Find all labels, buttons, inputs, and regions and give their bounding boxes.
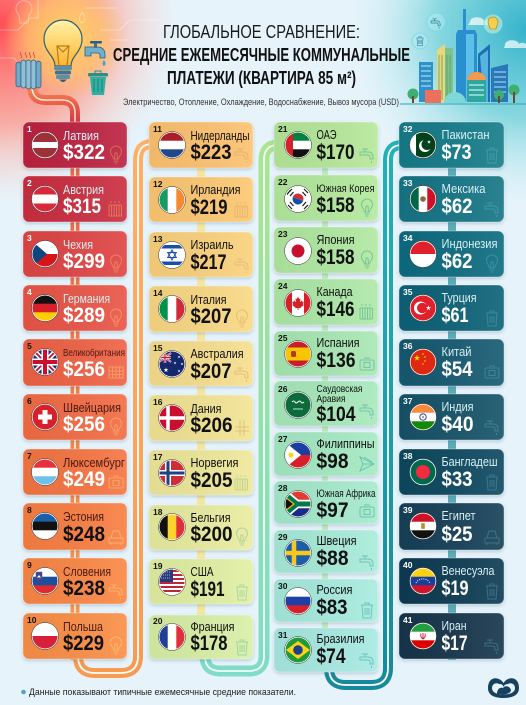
name: Пакистан	[442, 127, 490, 142]
pipes connecting the columns	[32, 86, 452, 685]
card: Великобритания: 5	[27, 341, 32, 351]
cost: $217	[190, 250, 227, 274]
logo	[488, 678, 519, 698]
flag: Индонезия	[410, 240, 436, 268]
pipe: column 3 to column 4	[329, 145, 402, 685]
name: Филиппины	[316, 436, 374, 451]
card: Франция	[149, 615, 253, 659]
icon: tap	[485, 421, 498, 435]
card: Латвия	[23, 122, 127, 168]
cost: $25	[442, 522, 473, 546]
card: Филиппины	[274, 432, 378, 476]
card: Германия: 4	[27, 287, 32, 297]
icon: bulb	[110, 255, 122, 272]
card: Бангладеш	[399, 449, 504, 495]
card: Словения: 9	[27, 560, 32, 570]
cost: $98	[316, 449, 349, 473]
card: Венесуэла: 40	[403, 560, 413, 570]
card: Турция: 35	[403, 287, 413, 297]
name: Бельгия	[190, 510, 230, 525]
cost: $315	[63, 194, 101, 218]
card: Венесуэла	[399, 558, 504, 604]
icon: radiator	[235, 475, 248, 490]
cost: $136	[316, 348, 356, 372]
name: Аравия	[316, 393, 346, 405]
name: Польша	[63, 619, 104, 634]
card: Бразилия: 31	[278, 630, 288, 640]
name: Нидерланды	[190, 128, 250, 143]
name: Великобритания	[63, 347, 125, 359]
name: Венесуэла	[442, 563, 495, 578]
cost: $73	[442, 140, 472, 164]
flag: Ирландия	[158, 186, 186, 214]
icon: tap	[109, 585, 122, 599]
flag: Россия	[284, 588, 312, 614]
card: Израиль: 13	[153, 234, 163, 244]
flag: Австрия	[32, 186, 58, 212]
title	[113, 22, 410, 88]
name: Швейцария	[63, 400, 121, 415]
card: Испания: 25	[278, 333, 288, 343]
flag: Южная Корея	[284, 186, 312, 212]
flag: Иран	[410, 622, 436, 650]
flag: Франция	[158, 624, 186, 650]
cost: $74	[316, 644, 346, 668]
name: Франция	[190, 619, 234, 634]
cost: $200	[190, 522, 233, 546]
pipe: column 3 spine	[322, 122, 328, 672]
card: Люксембург	[23, 449, 127, 495]
card: Швейцария	[23, 394, 127, 440]
card: Иран	[399, 613, 504, 659]
cost: $219	[190, 195, 228, 219]
card: Южная Корея	[274, 175, 378, 221]
name: Чехия	[63, 237, 93, 252]
name: Саудовская	[316, 383, 362, 395]
flag: Канада	[284, 290, 312, 316]
cost: $205	[190, 468, 233, 492]
icon: bulb	[362, 199, 372, 216]
card: Бельгия: 18	[153, 507, 163, 517]
card: Мексика: 33	[403, 178, 413, 188]
name: Израиль	[190, 237, 234, 252]
cost: $256	[63, 412, 105, 436]
icon: bulb	[236, 528, 248, 545]
cost: $19	[442, 576, 469, 600]
icon: bulb	[362, 251, 372, 268]
card: Иран: 41	[403, 615, 413, 625]
card: Южная Африка	[274, 481, 378, 524]
flag: ОАЭ	[284, 132, 312, 158]
card: Канада: 24	[278, 281, 288, 291]
flag: Австралия	[158, 350, 186, 378]
flag: Швеция	[284, 540, 312, 566]
flag: Италия	[158, 296, 186, 322]
flag: Люксембург	[32, 458, 58, 486]
card: Индия	[399, 394, 504, 440]
cost: $248	[63, 522, 105, 546]
name: Италия	[190, 292, 226, 307]
name	[316, 383, 362, 405]
cost: $229	[63, 631, 104, 655]
icon: radiator	[109, 201, 122, 216]
name: Россия	[316, 582, 352, 597]
icon: bulb	[110, 418, 122, 435]
icon: bed	[109, 531, 123, 545]
name: Бангладеш	[442, 454, 498, 469]
icon: tap	[235, 259, 248, 273]
flag: Польша	[32, 622, 58, 650]
icon: grid	[109, 367, 123, 378]
flag: Индия	[410, 404, 436, 430]
icon: radiator	[360, 304, 372, 319]
icon: bulb	[110, 309, 122, 326]
cost: $178	[190, 631, 228, 655]
card: Индонезия: 34	[403, 233, 413, 243]
name: Бразилия	[316, 631, 364, 646]
cost: $158	[316, 193, 355, 217]
card: Китай	[399, 339, 504, 386]
name: Индонезия	[442, 236, 498, 251]
card: Южная Африка: 28	[278, 483, 288, 493]
cost: $40	[442, 412, 474, 436]
name: ОАЭ	[316, 127, 336, 142]
cost: $170	[316, 140, 355, 164]
name: Норвегия	[190, 455, 238, 470]
card: Ирландия: 12	[153, 179, 163, 189]
column 1	[23, 122, 127, 659]
name: Ирландия	[190, 182, 240, 197]
flag: США	[158, 568, 186, 596]
icon: trash	[486, 311, 498, 326]
icon: light bulb	[44, 20, 82, 82]
icon: tap	[360, 556, 373, 570]
icon: bed	[485, 531, 499, 545]
subtitle: Электричество, Отопление, Охлаждение, Водоснабжение, Вывоз мусора (USD)	[123, 97, 399, 107]
card: Нидерланды: 11	[153, 124, 162, 134]
cost: $299	[63, 249, 105, 273]
cost: $289	[63, 303, 105, 327]
name: Южная Корея	[316, 183, 375, 195]
cost: $83	[316, 595, 348, 619]
column 2	[149, 122, 253, 659]
icon: trash	[236, 585, 248, 600]
card: Пакистан	[399, 122, 504, 168]
name: Дания	[190, 401, 222, 416]
column 3	[274, 122, 378, 672]
icon: bulb	[110, 637, 122, 654]
icon: tap	[235, 149, 248, 163]
cost: $17	[442, 631, 468, 655]
cost: $207	[190, 359, 232, 383]
name: Австрия	[63, 182, 104, 197]
cost: $146	[316, 297, 355, 321]
card: ОАЭ: 21	[278, 124, 288, 134]
name: Австралия	[190, 346, 244, 361]
name: Эстония	[63, 509, 104, 524]
column 4	[399, 122, 504, 659]
icon: box	[485, 366, 499, 378]
cost: $207	[190, 304, 232, 328]
card: Италия	[149, 286, 253, 332]
card: Египет: 39	[403, 505, 413, 515]
card: Австрия: 2	[27, 178, 32, 188]
card: Австралия	[149, 341, 253, 386]
flag: Дания	[158, 404, 186, 432]
pipe: column 1 spine	[70, 122, 80, 660]
card: Италия: 14	[153, 288, 163, 298]
cost: $249	[63, 467, 105, 491]
icon: tap	[360, 149, 373, 163]
cost: $97	[316, 498, 349, 522]
card: Япония	[274, 227, 378, 273]
name: Индия	[442, 399, 474, 414]
icon: radiator	[235, 202, 248, 217]
name: Япония	[316, 232, 354, 247]
card: ОАЭ	[274, 122, 378, 168]
card: Эстония	[23, 503, 127, 550]
cost: $62	[442, 249, 473, 273]
icon: tap	[360, 405, 373, 419]
name: Египет	[442, 508, 476, 523]
card: Чехия	[23, 231, 127, 277]
pipe: column 2 spine	[197, 122, 205, 660]
name: Словения	[63, 564, 111, 579]
illustration: city skyline	[400, 9, 526, 104]
card: Бельгия	[149, 505, 253, 550]
name: Германия	[63, 291, 110, 306]
cost: $54	[442, 357, 473, 381]
cost: $191	[190, 577, 225, 601]
flag: Пакистан	[410, 132, 436, 158]
icon: trash bin	[88, 71, 108, 95]
flag: Китай	[410, 348, 436, 376]
icon: trash	[486, 475, 498, 490]
card: Южная Корея: 22	[278, 177, 288, 187]
flag: Испания	[284, 340, 312, 368]
flag: Германия	[32, 294, 58, 322]
name: Латвия	[63, 128, 99, 143]
card: Китай: 36	[403, 341, 413, 351]
card: Израиль	[149, 232, 253, 277]
card: Саудовская Аравия: 26	[278, 384, 288, 394]
icon: tap	[360, 654, 373, 668]
flag: Мексика	[410, 186, 436, 212]
card: Пакистан: 32	[403, 124, 413, 134]
flag: Латвия	[32, 132, 58, 158]
icon: decorative circuit lines, left	[0, 0, 160, 65]
title: ПЛАТЕЖИ (КВАРТИРА 85 м²)	[167, 68, 356, 88]
card: Испания	[274, 331, 378, 376]
card: Австрия	[23, 176, 127, 222]
card: Канада	[274, 279, 378, 325]
flag: Япония	[284, 238, 312, 264]
flag: Венесуэла	[410, 568, 436, 594]
card: Турция	[399, 285, 504, 331]
card: США	[149, 559, 253, 604]
cost: $238	[63, 576, 105, 600]
card: Мексика	[399, 176, 504, 222]
icon: tap	[485, 640, 498, 654]
cost: $88	[316, 546, 349, 570]
pipe: column 2 to column 3	[205, 145, 278, 671]
card: Латвия: 1	[27, 124, 32, 134]
card: Ирландия	[149, 177, 253, 222]
card: Россия	[274, 579, 378, 622]
flag: Египет	[410, 512, 436, 540]
card: Норвегия	[149, 450, 253, 495]
card: Польша	[23, 613, 127, 659]
cost: $62	[442, 194, 473, 218]
icon: pipes	[235, 420, 249, 436]
icon: trash	[236, 640, 248, 655]
card: Польша: 10	[27, 615, 37, 625]
cost: $223	[190, 140, 232, 164]
card: Саудовская Аравия	[274, 381, 378, 426]
name: США	[190, 564, 214, 579]
flag: Саудовская Аравия	[284, 392, 312, 418]
flag: Норвегия	[158, 460, 186, 486]
card: Филиппины: 27	[278, 434, 288, 444]
card: Швеция	[274, 530, 378, 573]
flag: Бразилия	[284, 636, 312, 664]
name: Турция	[442, 290, 476, 305]
pipe: column 4 spine	[448, 122, 456, 660]
name: Иран	[442, 618, 466, 633]
flag: Бангладеш	[410, 458, 436, 486]
flag: Турция	[410, 294, 436, 322]
card: Дания: 16	[153, 397, 163, 407]
flag: Швейцария	[32, 404, 58, 430]
footnote: Данные показывают типичные ежемесячные средние показатели.	[29, 687, 296, 697]
card: Словения	[23, 558, 127, 604]
cost: $104	[316, 402, 356, 426]
flag: Великобритания	[32, 348, 58, 376]
icon: bulb	[486, 255, 498, 272]
card: Франция: 20	[153, 616, 163, 626]
name: Южная Африка	[316, 488, 376, 500]
card: Люксембург: 7	[27, 451, 32, 461]
cost: $256	[63, 357, 105, 381]
flag: Словения	[32, 568, 58, 594]
card: Эстония: 8	[27, 505, 32, 515]
card: Германия	[23, 285, 127, 331]
name: Китай	[442, 344, 472, 359]
pipe: column 1 to column 2	[78, 144, 152, 673]
icon: trash	[486, 584, 498, 599]
card: Япония: 23	[278, 229, 288, 239]
card: Индия: 37	[403, 396, 413, 406]
icon: bulb	[236, 310, 248, 327]
cost: $322	[63, 140, 105, 164]
card: Россия: 30	[278, 581, 288, 591]
title: ГЛОБАЛЬНОЕ СРАВНЕНИЕ:	[163, 22, 360, 42]
icon: tap	[485, 203, 498, 217]
name: Люксембург	[63, 455, 125, 470]
name: Швеция	[316, 533, 356, 548]
icon: radiator	[16, 52, 41, 89]
card: Австралия: 15	[153, 343, 163, 353]
flag: Израиль	[158, 242, 186, 268]
card: Дания	[149, 395, 253, 441]
pipe: radiator to column 1	[32, 86, 75, 124]
flag: Филиппины	[284, 442, 312, 468]
card: Египет	[399, 503, 504, 550]
card: Чехия: 3	[27, 233, 32, 243]
flag: Нидерланды	[158, 132, 186, 158]
flag: Чехия	[32, 240, 58, 268]
flag: Эстония	[32, 512, 58, 540]
icon: grid	[360, 505, 374, 517]
cost: $33	[442, 467, 473, 491]
card: Норвегия: 17	[153, 452, 163, 462]
card: США: 19	[153, 561, 163, 571]
flag: Бельгия	[158, 514, 186, 540]
icon: tap	[235, 368, 248, 382]
name: Мексика	[442, 181, 486, 196]
flag: Южная Африка	[284, 490, 312, 518]
cost: $61	[442, 303, 469, 327]
icon: box	[360, 358, 374, 370]
card: Бразилия	[274, 628, 378, 672]
card: Швеция: 29	[278, 532, 288, 542]
title: СРЕДНИЕ ЕЖЕМЕСЯЧНЫЕ КОММУНАЛЬНЫЕ	[113, 45, 410, 65]
name: Канада	[316, 284, 353, 299]
icon: box	[109, 476, 123, 488]
card: Нидерланды	[149, 122, 253, 168]
card: Швейцария: 6	[27, 396, 32, 406]
card: Индонезия	[399, 231, 504, 277]
icon: arrow	[360, 457, 374, 471]
card: Великобритания	[23, 339, 127, 386]
icon: trash	[486, 148, 498, 163]
cost: $206	[190, 413, 233, 437]
icon: bulb	[110, 146, 122, 163]
cost: $158	[316, 245, 355, 269]
icon: water tap	[85, 41, 106, 66]
name: Испания	[316, 335, 360, 350]
icon: trash	[361, 603, 373, 618]
card: Бангладеш: 38	[403, 451, 413, 461]
